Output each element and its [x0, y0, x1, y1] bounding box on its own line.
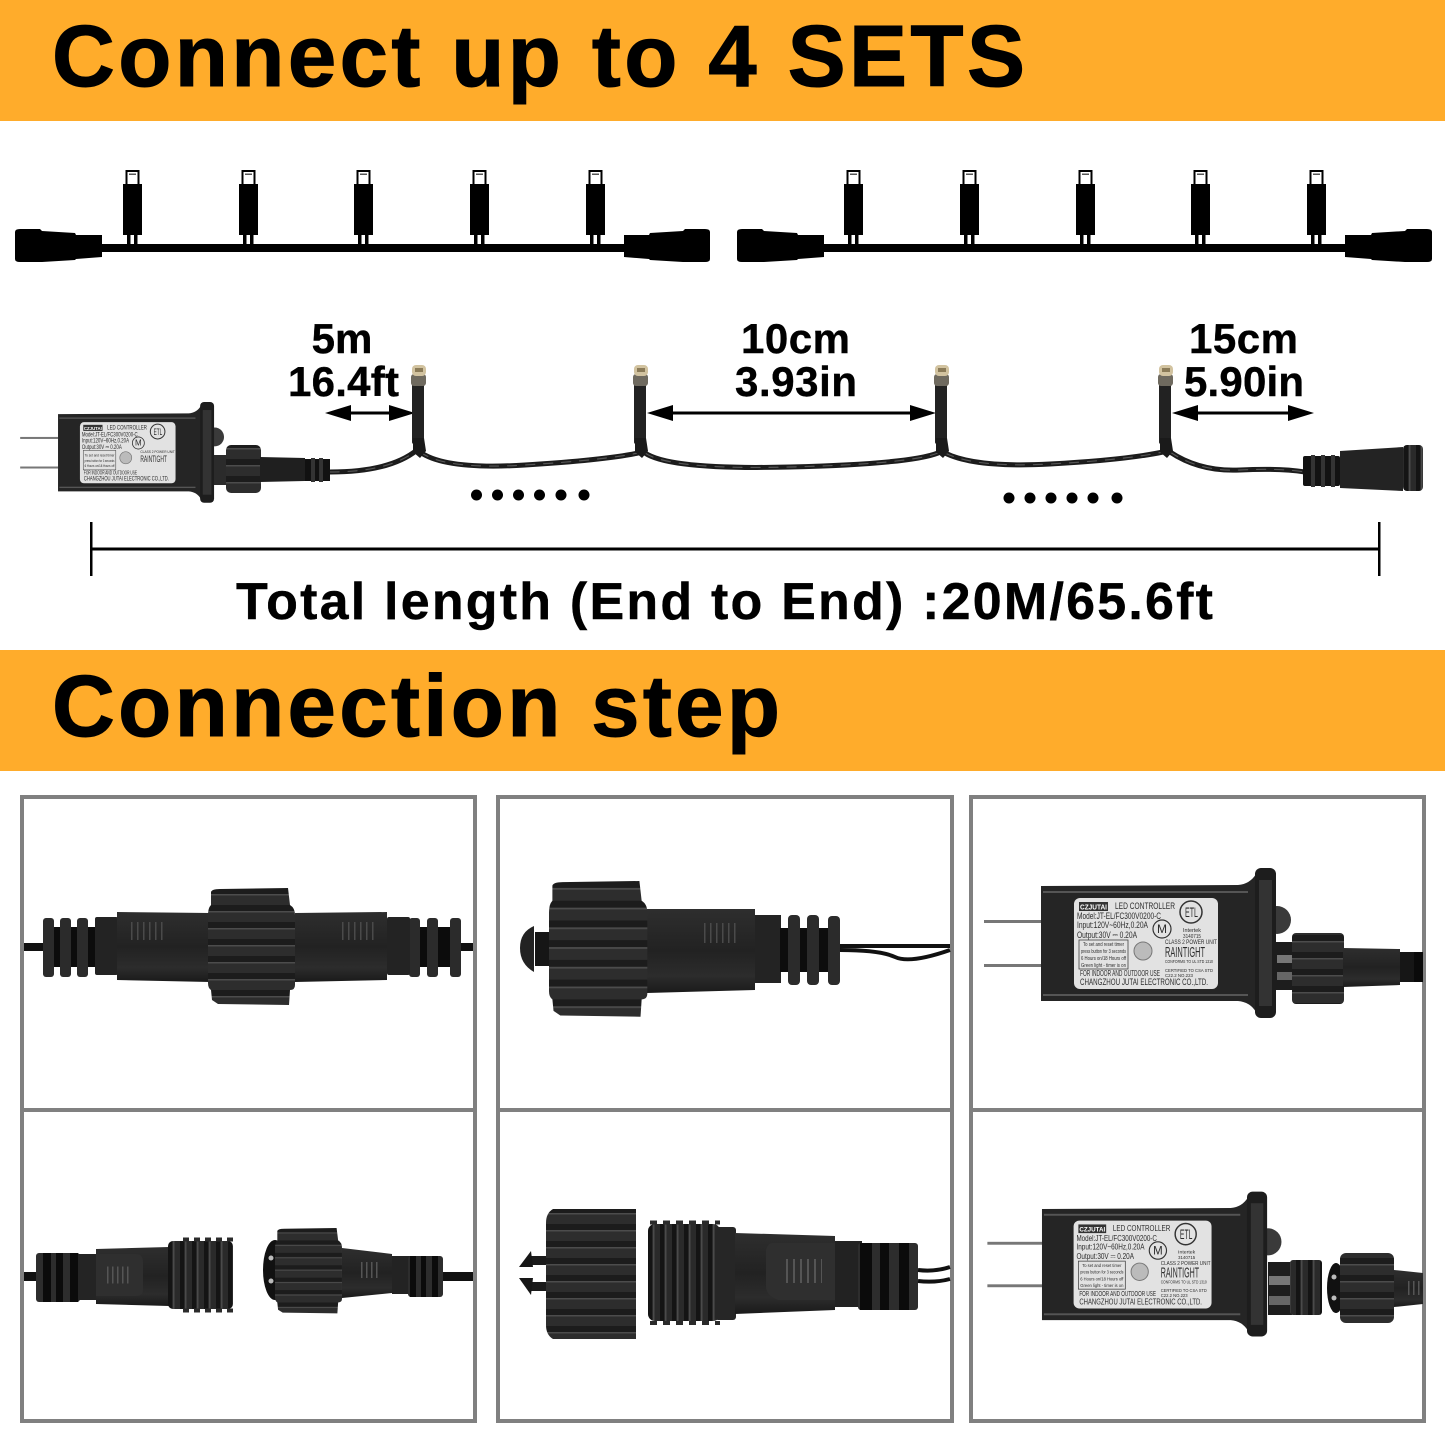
bulb 5 — [586, 171, 605, 245]
controller label: CERTIFIED TO CSA STD — [1165, 968, 1214, 973]
bulb 3 — [354, 171, 373, 245]
controller label: press button for 3 seconds — [1081, 949, 1126, 955]
diagram: light string set 1 — [15, 171, 710, 262]
controller label: CHANGZHOU JUTAI ELECTRONIC CO.,LTD. — [1080, 977, 1208, 987]
dimension labels: 5m — [312, 315, 372, 362]
banner: connection step — [0, 650, 1445, 771]
controller label: C22.2 NO.223 — [1165, 973, 1193, 978]
controller label: RAINTIGHT — [1165, 944, 1205, 961]
twisted wire string — [330, 365, 1305, 472]
controller label: Intertek — [1183, 928, 1202, 934]
bulb 9 — [1191, 171, 1210, 245]
controller label: CZJUTAI — [1079, 1227, 1105, 1234]
controller label: Green light - timer is on — [1080, 1283, 1124, 1289]
controller label: M — [1157, 922, 1167, 936]
total length text: Total length (End to End) :20M/65.6ft — [236, 573, 1213, 631]
controller label: Input:120V~60Hz,0.20A — [82, 438, 129, 444]
controller label: Model:JT-EL/FC300V0200-C — [1076, 1233, 1157, 1243]
controller label: M — [135, 439, 142, 448]
step 3b: controller with connector apart — [987, 1192, 1423, 1336]
dimension labels: 3.93in — [735, 358, 857, 405]
controller label: CHANGZHOU JUTAI ELECTRONIC CO.,LTD. — [84, 477, 169, 483]
heading: connection step: Connection step — [52, 658, 780, 755]
controller label: press button for 3 seconds — [1080, 1270, 1124, 1276]
step 2: capped connector — [520, 881, 950, 1017]
controller label: Output:30V ⎓ 0.20A — [1076, 1251, 1134, 1261]
step 1b: connectors apart — [24, 1228, 473, 1313]
controller label: CERTIFIED TO CSA STD — [1161, 1288, 1207, 1293]
bulb 10 — [1307, 171, 1326, 245]
controller label: To set and reset timer — [1082, 1263, 1122, 1269]
bulb 7 — [960, 171, 979, 245]
controller label: To set and reset timer — [1083, 942, 1124, 948]
controller label: CLASS 2 POWER UNIT — [1165, 940, 1217, 946]
bulb 6 — [844, 171, 863, 245]
total length bracket — [90, 522, 1380, 576]
controller label: Output:30V ⎓ 0.20A — [1077, 930, 1137, 940]
wire bulb b — [633, 365, 648, 458]
controller label: CONFORMS TO UL STD 1310 — [1165, 959, 1213, 964]
controller label: M — [1153, 1245, 1163, 1257]
controller label: CHANGZHOU JUTAI ELECTRONIC CO.,LTD. — [1079, 1297, 1202, 1307]
controller label: Output:30V ⎓ 0.20A — [82, 445, 122, 451]
controller label: LED CONTROLLER — [1113, 1223, 1170, 1233]
controller label: Input:120V~60Hz,0.20A — [1077, 920, 1148, 930]
wire bulb d — [1158, 365, 1173, 458]
bulb 2 — [239, 171, 258, 245]
controller label: RAINTIGHT — [1161, 1266, 1199, 1282]
step 3: controller with connector joined — [984, 868, 1423, 1018]
controller label: CONFORMS TO UL STD 1310 — [1161, 1279, 1207, 1284]
controller label: 3140715 — [1183, 934, 1201, 940]
dimension labels: 10cm — [741, 315, 850, 362]
dimension labels: 5.90in — [1184, 358, 1304, 405]
controller label: 6 Hours on/18 Hours off — [85, 464, 115, 468]
bulb 4 — [470, 171, 489, 245]
controller label: FOR INDOOR AND OUTDOOR USE — [84, 471, 137, 477]
step 1: connectors joined — [24, 888, 473, 1005]
controller label: CLASS 2 POWER UNIT — [140, 449, 175, 454]
controller label: C22.2 NO.223 — [1161, 1293, 1188, 1298]
controller label: ETL — [1185, 904, 1198, 920]
controller label: FOR INDOOR AND OUTDOOR USE — [1079, 1289, 1156, 1298]
controller label: FOR INDOOR AND OUTDOOR USE — [1080, 969, 1160, 978]
bulb 1 — [123, 171, 142, 245]
controller label: LED CONTROLLER — [1115, 901, 1175, 911]
controller with plug on string — [20, 402, 330, 503]
end connector on string — [1303, 445, 1423, 491]
controller label: LED CONTROLLER — [107, 426, 147, 432]
controller label: CLASS 2 POWER UNIT — [1161, 1261, 1211, 1267]
controller label: ETL — [154, 427, 162, 437]
controller label: CZJUTAI — [84, 426, 102, 431]
controller label — [1077, 901, 1217, 987]
controller label: Green light - timer is on — [1081, 963, 1126, 969]
dots — [471, 490, 1122, 504]
controller label: Input:120V~60Hz,0.20A — [1076, 1242, 1145, 1252]
dimension labels: 15cm — [1189, 315, 1298, 362]
controller label: Model:JT-EL/FC300V0200-C — [82, 432, 138, 438]
panel: frames — [22, 797, 1424, 1421]
dimension labels — [288, 315, 1304, 405]
bulb 8 — [1076, 171, 1095, 245]
controller label: press button for 3 seconds — [85, 459, 115, 463]
controller label: 3140715 — [1178, 1255, 1196, 1261]
controller label — [1076, 1223, 1211, 1307]
controller label — [82, 426, 175, 483]
heading: connect: Connect up to 4 SETS — [52, 8, 1025, 105]
dimension labels: 16.4ft — [288, 358, 399, 405]
controller label: ETL — [1180, 1227, 1193, 1242]
controller label: RAINTIGHT — [140, 454, 167, 464]
controller label: Intertek — [1178, 1249, 1196, 1255]
wire bulb a — [411, 365, 426, 458]
controller label: 6 Hours on/18 Hours off — [1080, 1276, 1124, 1282]
controller label: To set and reset timer — [85, 453, 115, 457]
controller label: 6 Hours on/18 Hours off — [1081, 956, 1127, 962]
controller label: Model:JT-EL/FC300V0200-C — [1077, 911, 1161, 921]
diagram: light string set 2 — [737, 171, 1432, 262]
controller label: CZJUTAI — [1080, 904, 1107, 912]
step 2b: cap removed — [519, 1209, 950, 1339]
wire bulb c — [934, 365, 949, 458]
banner: connect up to 4 sets — [0, 0, 1445, 121]
arrows — [325, 405, 1314, 421]
